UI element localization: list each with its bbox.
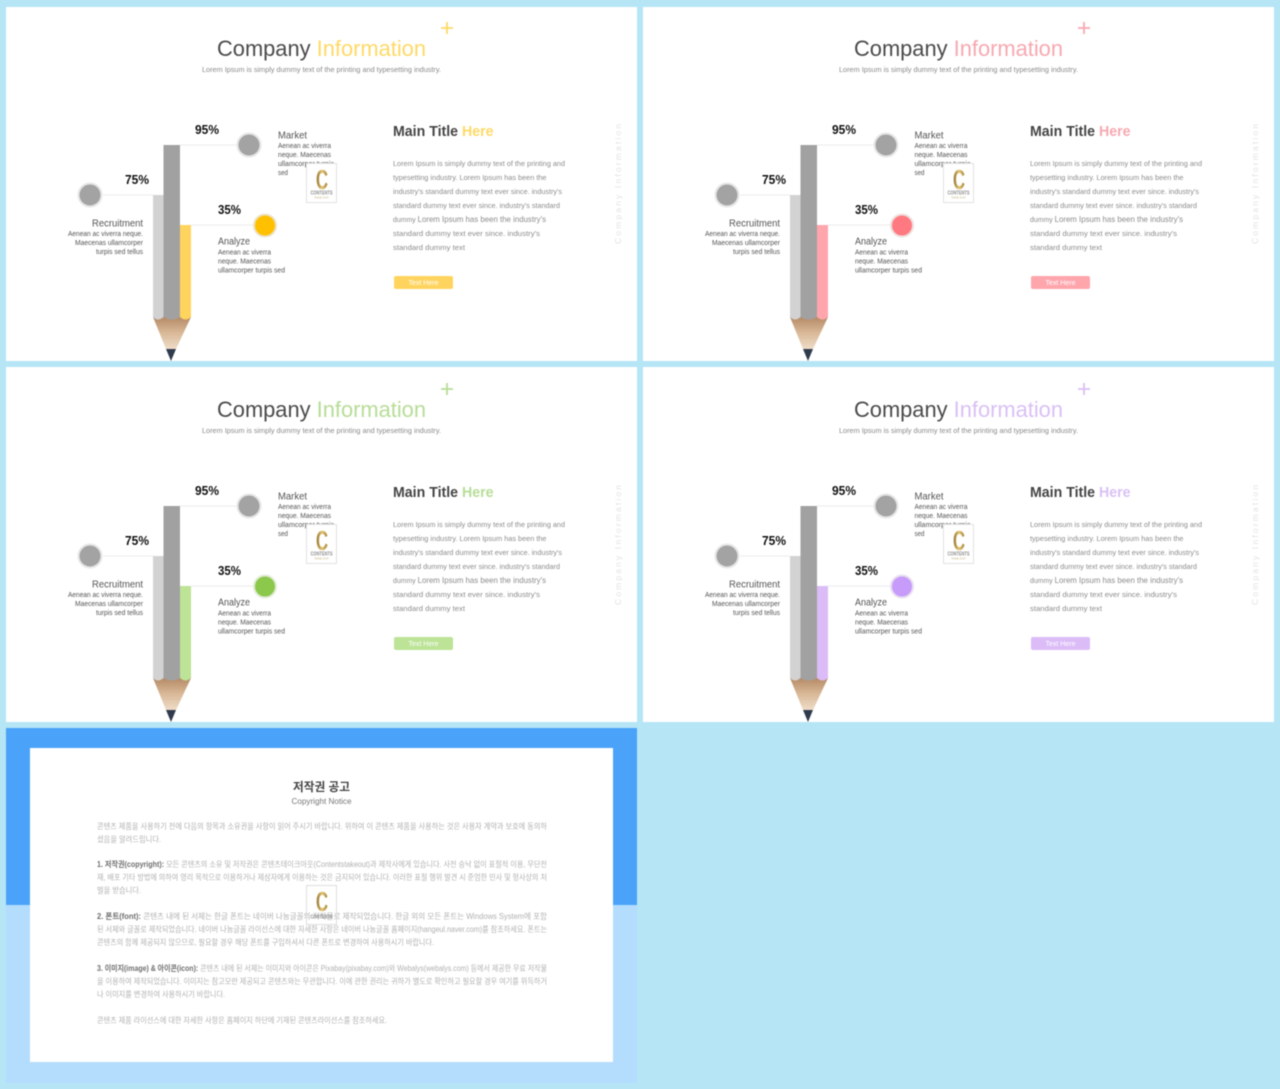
- text block: analyze: [855, 598, 922, 636]
- logo: CONTENTS: [310, 552, 333, 558]
- 35% analyze marker: [218, 563, 276, 598]
- body text: Lorem Ipsum is simply dummy text of the printing and: [1030, 159, 1202, 168]
- text block: market: [278, 130, 334, 177]
- text block: analyze: ullamcorper turpis sed: [218, 628, 285, 636]
- text block: market: [914, 130, 971, 177]
- panel: yellow slide: [6, 7, 637, 361]
- logo: CONTENTS: [948, 190, 970, 196]
- body text: typesetting industry. Lorem Ipsum has been the: [1030, 534, 1184, 543]
- 95% market marker: 95%: [832, 122, 856, 137]
- 75% recruitment marker: 75%: [125, 172, 149, 187]
- logo: CONTENTS: [948, 552, 970, 558]
- body text: standard dummy text ever since. industry's standard: [393, 201, 560, 210]
- text block: analyze: Aenean ac viverra: [218, 610, 271, 618]
- text block: recruitment: Maecenas ullamcorper: [712, 240, 781, 247]
- text block: recruitment: Recruitment: [92, 218, 143, 230]
- logo: C: [953, 164, 965, 195]
- text block: recruitment: turpis sed tellus: [733, 610, 780, 617]
- notice heading: 저작권 공고: [293, 779, 350, 794]
- slide background: [643, 7, 1274, 361]
- text block: market: ullamcorper turpis: [914, 522, 971, 529]
- button: Text Here: [1046, 641, 1076, 648]
- logo: [306, 164, 336, 202]
- logo: C: [316, 164, 328, 195]
- title: Company Information: [854, 36, 1063, 61]
- body text: standard dummy text ever since. industry's standard: [1030, 201, 1197, 210]
- body text: standard dummy text ever since. industry's: [1030, 229, 1177, 238]
- button: [394, 276, 453, 289]
- text block: recruitment: [705, 218, 781, 256]
- text block: market: sed: [278, 170, 288, 177]
- notice intro: [97, 821, 548, 844]
- 35% analyze marker: 35%: [855, 563, 878, 578]
- body text: standard dummy text: [1030, 243, 1103, 252]
- text block: market: Market: [278, 130, 307, 142]
- body text: [1030, 159, 1202, 252]
- logo: CONTENTS: [310, 914, 333, 920]
- text block: market: [914, 492, 971, 538]
- vertical label: Company Information: [613, 124, 623, 244]
- body text: typesetting industry. Lorem Ipsum has been the: [1030, 173, 1184, 182]
- text block: market: sed: [278, 531, 288, 538]
- text block: analyze: Aenean ac viverra: [855, 250, 908, 256]
- body text: industry's standard dummy text ever since. industry's: [1030, 187, 1199, 196]
- text block: recruitment: Maecenas ullamcorper: [712, 601, 781, 608]
- text block: recruitment: Maecenas ullamcorper: [75, 601, 144, 608]
- text block: analyze: ullamcorper turpis sed: [855, 628, 922, 636]
- pencil chart: [103, 506, 253, 722]
- body text: standard dummy text ever since. industry's: [1030, 590, 1177, 599]
- body text: standard dummy text: [393, 243, 466, 252]
- text block: analyze: Analyze: [218, 598, 250, 608]
- notice section: font: 콘텐츠의 함께 제공되지 않으므로, 필요할 경우 해당 폰트를 구입하셔서 다른 폰트로 변경하여 사용하시기 바랍니다.: [97, 937, 434, 947]
- vertical label: Company Information: [1250, 485, 1260, 605]
- 75% recruitment marker: 75%: [762, 172, 786, 187]
- text block: analyze: neque. Maecenas: [218, 620, 271, 626]
- notice section: copyright: 재, 배포 기타 방법에 의하여 영리 목적으로 이용하거나 제삼자에게 이용하는 것은 금지되어 있습니다. 이러한 표절 행위 발견 시 준엄한 민사 및 형사상의 처: [97, 872, 547, 882]
- button: Text Here: [409, 280, 439, 287]
- body text: [1030, 520, 1202, 613]
- body text: standard dummy text ever since. industry's standard: [393, 562, 560, 571]
- logo: [306, 886, 336, 924]
- text block: market: Market: [914, 130, 944, 142]
- body text: standard dummy text: [1030, 604, 1103, 613]
- main title: Main Title Here: [393, 485, 494, 501]
- text block: market: ullamcorper turpis: [914, 161, 971, 168]
- 75% recruitment marker: [78, 533, 149, 568]
- body text: industry's standard dummy text ever since. industry's: [393, 548, 562, 557]
- title: Company Information: [217, 36, 426, 61]
- blue header band: [6, 728, 637, 905]
- icon: plus: [1078, 22, 1090, 34]
- subtitle: Lorem Ipsum is simply dummy text of the printing and typesetting industry.: [202, 65, 441, 74]
- notice section: image and icon: 3. 이미지(image) & 아이콘(icon): 콘텐츠 내에 된 서체는 이미지와 아이콘은 Pixabay(pixabay.com)와 Webalys(webalys.com) 등에서 제공한 무료 저작물: [97, 963, 547, 973]
- notice section: copyright: 1. 저작권(copyright): 모든 콘텐츠의 소유 및 저작권은 콘텐츠테이크아웃(Contentstakeout)과 제작사에게 있습니다. 사전 승낙 없이 표절적 이용, 무단전: [97, 859, 547, 869]
- panel: green slide: [6, 367, 637, 722]
- text block: analyze: ullamcorper turpis sed: [218, 268, 285, 274]
- text block: recruitment: Recruitment: [92, 580, 143, 590]
- text block: recruitment: turpis sed tellus: [96, 610, 143, 617]
- text block: market: ullamcorper turpis: [278, 522, 334, 529]
- 35% analyze marker: [855, 202, 913, 236]
- logo: C: [953, 525, 965, 556]
- text block: market: Market: [278, 492, 307, 502]
- 95% market marker: [832, 483, 898, 518]
- 75% recruitment marker: [78, 172, 149, 206]
- body text: standard dummy text ever since. industry's: [393, 229, 540, 238]
- logo: C: [316, 525, 328, 556]
- logo: [944, 524, 974, 564]
- button: [1031, 276, 1090, 289]
- text block: market: Market: [914, 492, 944, 502]
- 95% market marker: [832, 122, 898, 156]
- 35% analyze marker: [855, 563, 913, 598]
- light blue lower band: [6, 905, 637, 1083]
- text block: market: sed: [914, 531, 925, 538]
- button: Text Here: [409, 641, 439, 648]
- notice footer line: 콘텐츠 제품 라이선스에 대한 자세한 사항은 홈페이지 하단에 기재된 콘텐츠라이선스를 참조하세요.: [97, 1015, 387, 1025]
- text block: market: Aenean ac viverra: [914, 143, 968, 150]
- title: Company Information: [217, 397, 426, 422]
- 95% market marker: [195, 483, 260, 518]
- text block: market: ullamcorper turpis: [278, 161, 334, 168]
- body text: [393, 520, 565, 613]
- button: Text Here: [1046, 280, 1076, 287]
- slide background: [6, 7, 637, 361]
- notice intro: 콘텐츠 제품을 사용하기 전에 다음의 항목과 소유권을 사항이 읽어 주시기 바랍니다. 위하여 이 콘텐츠 제품을 사용하는 것은 사용자 계약과 보호에 동의하: [97, 821, 548, 831]
- 75% recruitment marker: [716, 172, 786, 206]
- text block: recruitment: [68, 580, 144, 617]
- text block: recruitment: Aenean ac viverra neque.: [68, 231, 143, 238]
- icon: plus: [1078, 383, 1090, 395]
- text block: recruitment: Maecenas ullamcorper: [75, 240, 144, 247]
- text block: market: neque. Maecenas: [278, 513, 331, 520]
- text block: recruitment: turpis sed tellus: [733, 249, 780, 256]
- panel: copyright notice: [6, 728, 637, 1083]
- panel: pink slide: [643, 7, 1274, 361]
- body text: typesetting industry. Lorem Ipsum has been the: [393, 173, 546, 182]
- text block: market: Aenean ac viverra: [278, 143, 331, 150]
- logo: TAKE OUT: [314, 556, 329, 560]
- text block: analyze: Aenean ac viverra: [218, 250, 271, 256]
- text block: market: neque. Maecenas: [914, 152, 968, 159]
- text block: market: Aenean ac viverra: [914, 504, 968, 511]
- slide background: [6, 367, 637, 722]
- text block: analyze: Analyze: [855, 598, 887, 608]
- white notice card: [30, 748, 613, 1062]
- icon: plus: [441, 383, 453, 395]
- icon: plus: [441, 22, 453, 34]
- 75% recruitment marker: 75%: [762, 533, 786, 548]
- 95% market marker: 95%: [832, 483, 856, 498]
- logo: TAKE OUT: [314, 196, 329, 200]
- notice section: font: [97, 911, 548, 947]
- logo: [306, 524, 336, 564]
- text block: analyze: Aenean ac viverra: [855, 610, 908, 618]
- text block: analyze: Analyze: [855, 236, 887, 248]
- logo: C: [316, 886, 328, 917]
- subtitle: Lorem Ipsum is simply dummy text of the printing and typesetting industry.: [839, 65, 1078, 74]
- pencil chart: [740, 145, 890, 361]
- notice section: copyright: 벌을 받습니다.: [97, 885, 141, 895]
- text block: analyze: neque. Maecenas: [855, 258, 908, 266]
- body text: Lorem Ipsum is simply dummy text of the printing and: [1030, 520, 1202, 529]
- text block: recruitment: turpis sed tellus: [96, 249, 143, 256]
- 35% analyze marker: 35%: [855, 202, 878, 217]
- body text: standard dummy text: [393, 604, 466, 613]
- 35% analyze marker: 35%: [218, 563, 241, 578]
- button: [1031, 637, 1090, 650]
- text block: recruitment: Recruitment: [729, 218, 780, 230]
- body text: dummy Lorem Ipsum has been the industry's: [1030, 575, 1183, 585]
- text block: market: [278, 492, 334, 538]
- pencil chart: [740, 506, 890, 722]
- 75% recruitment marker: [716, 533, 786, 568]
- text block: market: Aenean ac viverra: [278, 504, 331, 511]
- text block: analyze: [855, 236, 922, 274]
- logo: [944, 164, 974, 202]
- body text: dummy Lorem Ipsum has been the industry's: [393, 575, 546, 585]
- text block: market: sed: [914, 170, 925, 177]
- body text: typesetting industry. Lorem Ipsum has been the: [393, 534, 546, 543]
- text block: analyze: neque. Maecenas: [855, 620, 908, 626]
- 95% market marker: 95%: [195, 122, 219, 137]
- main title: Main Title Here: [1030, 124, 1130, 140]
- body text: dummy Lorem Ipsum has been the industry's: [1030, 214, 1183, 224]
- logo: CONTENTS: [310, 190, 333, 196]
- text block: recruitment: Aenean ac viverra neque.: [705, 231, 780, 238]
- text block: recruitment: Aenean ac viverra neque.: [68, 592, 143, 599]
- logo: TAKE OUT: [951, 556, 966, 560]
- text block: analyze: [218, 598, 285, 636]
- notice section: image and icon: [97, 963, 547, 999]
- 95% market marker: 95%: [195, 483, 219, 498]
- body text: standard dummy text ever since. industry's standard: [1030, 562, 1197, 571]
- body text: [393, 159, 565, 252]
- subtitle: Lorem Ipsum is simply dummy text of the printing and typesetting industry.: [202, 426, 441, 435]
- body text: industry's standard dummy text ever since. industry's: [1030, 548, 1199, 557]
- body text: Lorem Ipsum is simply dummy text of the printing and: [393, 520, 565, 529]
- notice section: copyright: [97, 859, 547, 895]
- 35% analyze marker: 35%: [218, 202, 241, 217]
- main title: Main Title Here: [1030, 485, 1130, 501]
- notice section: font: 된 서체와 글꼴로 제작되었습니다. 네이버 나눔글꼴 라이선스에 대한 자세한 사항은 네이버 나눔글꼴 홈페이지(hangeul.naver.com)를 참조하세요. 폰트는: [97, 924, 547, 934]
- title: Company Information: [854, 397, 1063, 422]
- vertical label: Company Information: [1250, 124, 1260, 244]
- body text: standard dummy text ever since. industry's: [393, 590, 540, 599]
- notice section: font: 2. 폰트(font): 콘텐츠 내에 된 서체는 한글 폰트는 네이버 나눔글꼴의 저작물로 제작되었습니다. 한글 외의 모든 폰트는 Windows System에 포함: [97, 911, 548, 921]
- text block: analyze: Analyze: [218, 236, 250, 248]
- text block: analyze: neque. Maecenas: [218, 258, 271, 266]
- text block: market: neque. Maecenas: [914, 513, 968, 520]
- 95% market marker: [195, 122, 260, 156]
- notice section: image and icon: 을 이용하여 제작되었습니다. 이미지는 참고모란 제공되고 콘텐츠와는 무관합니다. 이에 관한 권리는 귀하가 별도로 확인하고 필요할 경우 여기를 위득하거: [97, 976, 547, 986]
- text block: analyze: [218, 236, 285, 274]
- subtitle: Lorem Ipsum is simply dummy text of the printing and typesetting industry.: [839, 426, 1078, 435]
- text block: recruitment: Aenean ac viverra neque.: [705, 592, 780, 599]
- pencil chart: [103, 145, 253, 361]
- notice intro: 셨음을 알려드립니다.: [97, 834, 161, 844]
- slide background: [643, 367, 1274, 722]
- text block: recruitment: [68, 218, 144, 256]
- body text: Lorem Ipsum is simply dummy text of the printing and: [393, 159, 565, 168]
- main title: Main Title Here: [393, 124, 494, 140]
- logo: TAKE OUT: [951, 196, 966, 200]
- 35% analyze marker: [218, 202, 276, 236]
- panel: purple slide: [643, 367, 1274, 722]
- text block: recruitment: [705, 580, 781, 617]
- 75% recruitment marker: 75%: [125, 533, 149, 548]
- text block: recruitment: Recruitment: [729, 580, 780, 590]
- vertical label: Company Information: [613, 485, 623, 605]
- notice section: image and icon: 나 이미지를 변경하여 사용하시기 바랍니다.: [97, 989, 225, 999]
- text block: analyze: ullamcorper turpis sed: [855, 268, 922, 274]
- body text: dummy Lorem Ipsum has been the industry's: [393, 214, 546, 224]
- body text: industry's standard dummy text ever since. industry's: [393, 187, 562, 196]
- text block: market: neque. Maecenas: [278, 152, 331, 159]
- notice subheading: Copyright Notice: [292, 796, 352, 806]
- button: [394, 637, 453, 650]
